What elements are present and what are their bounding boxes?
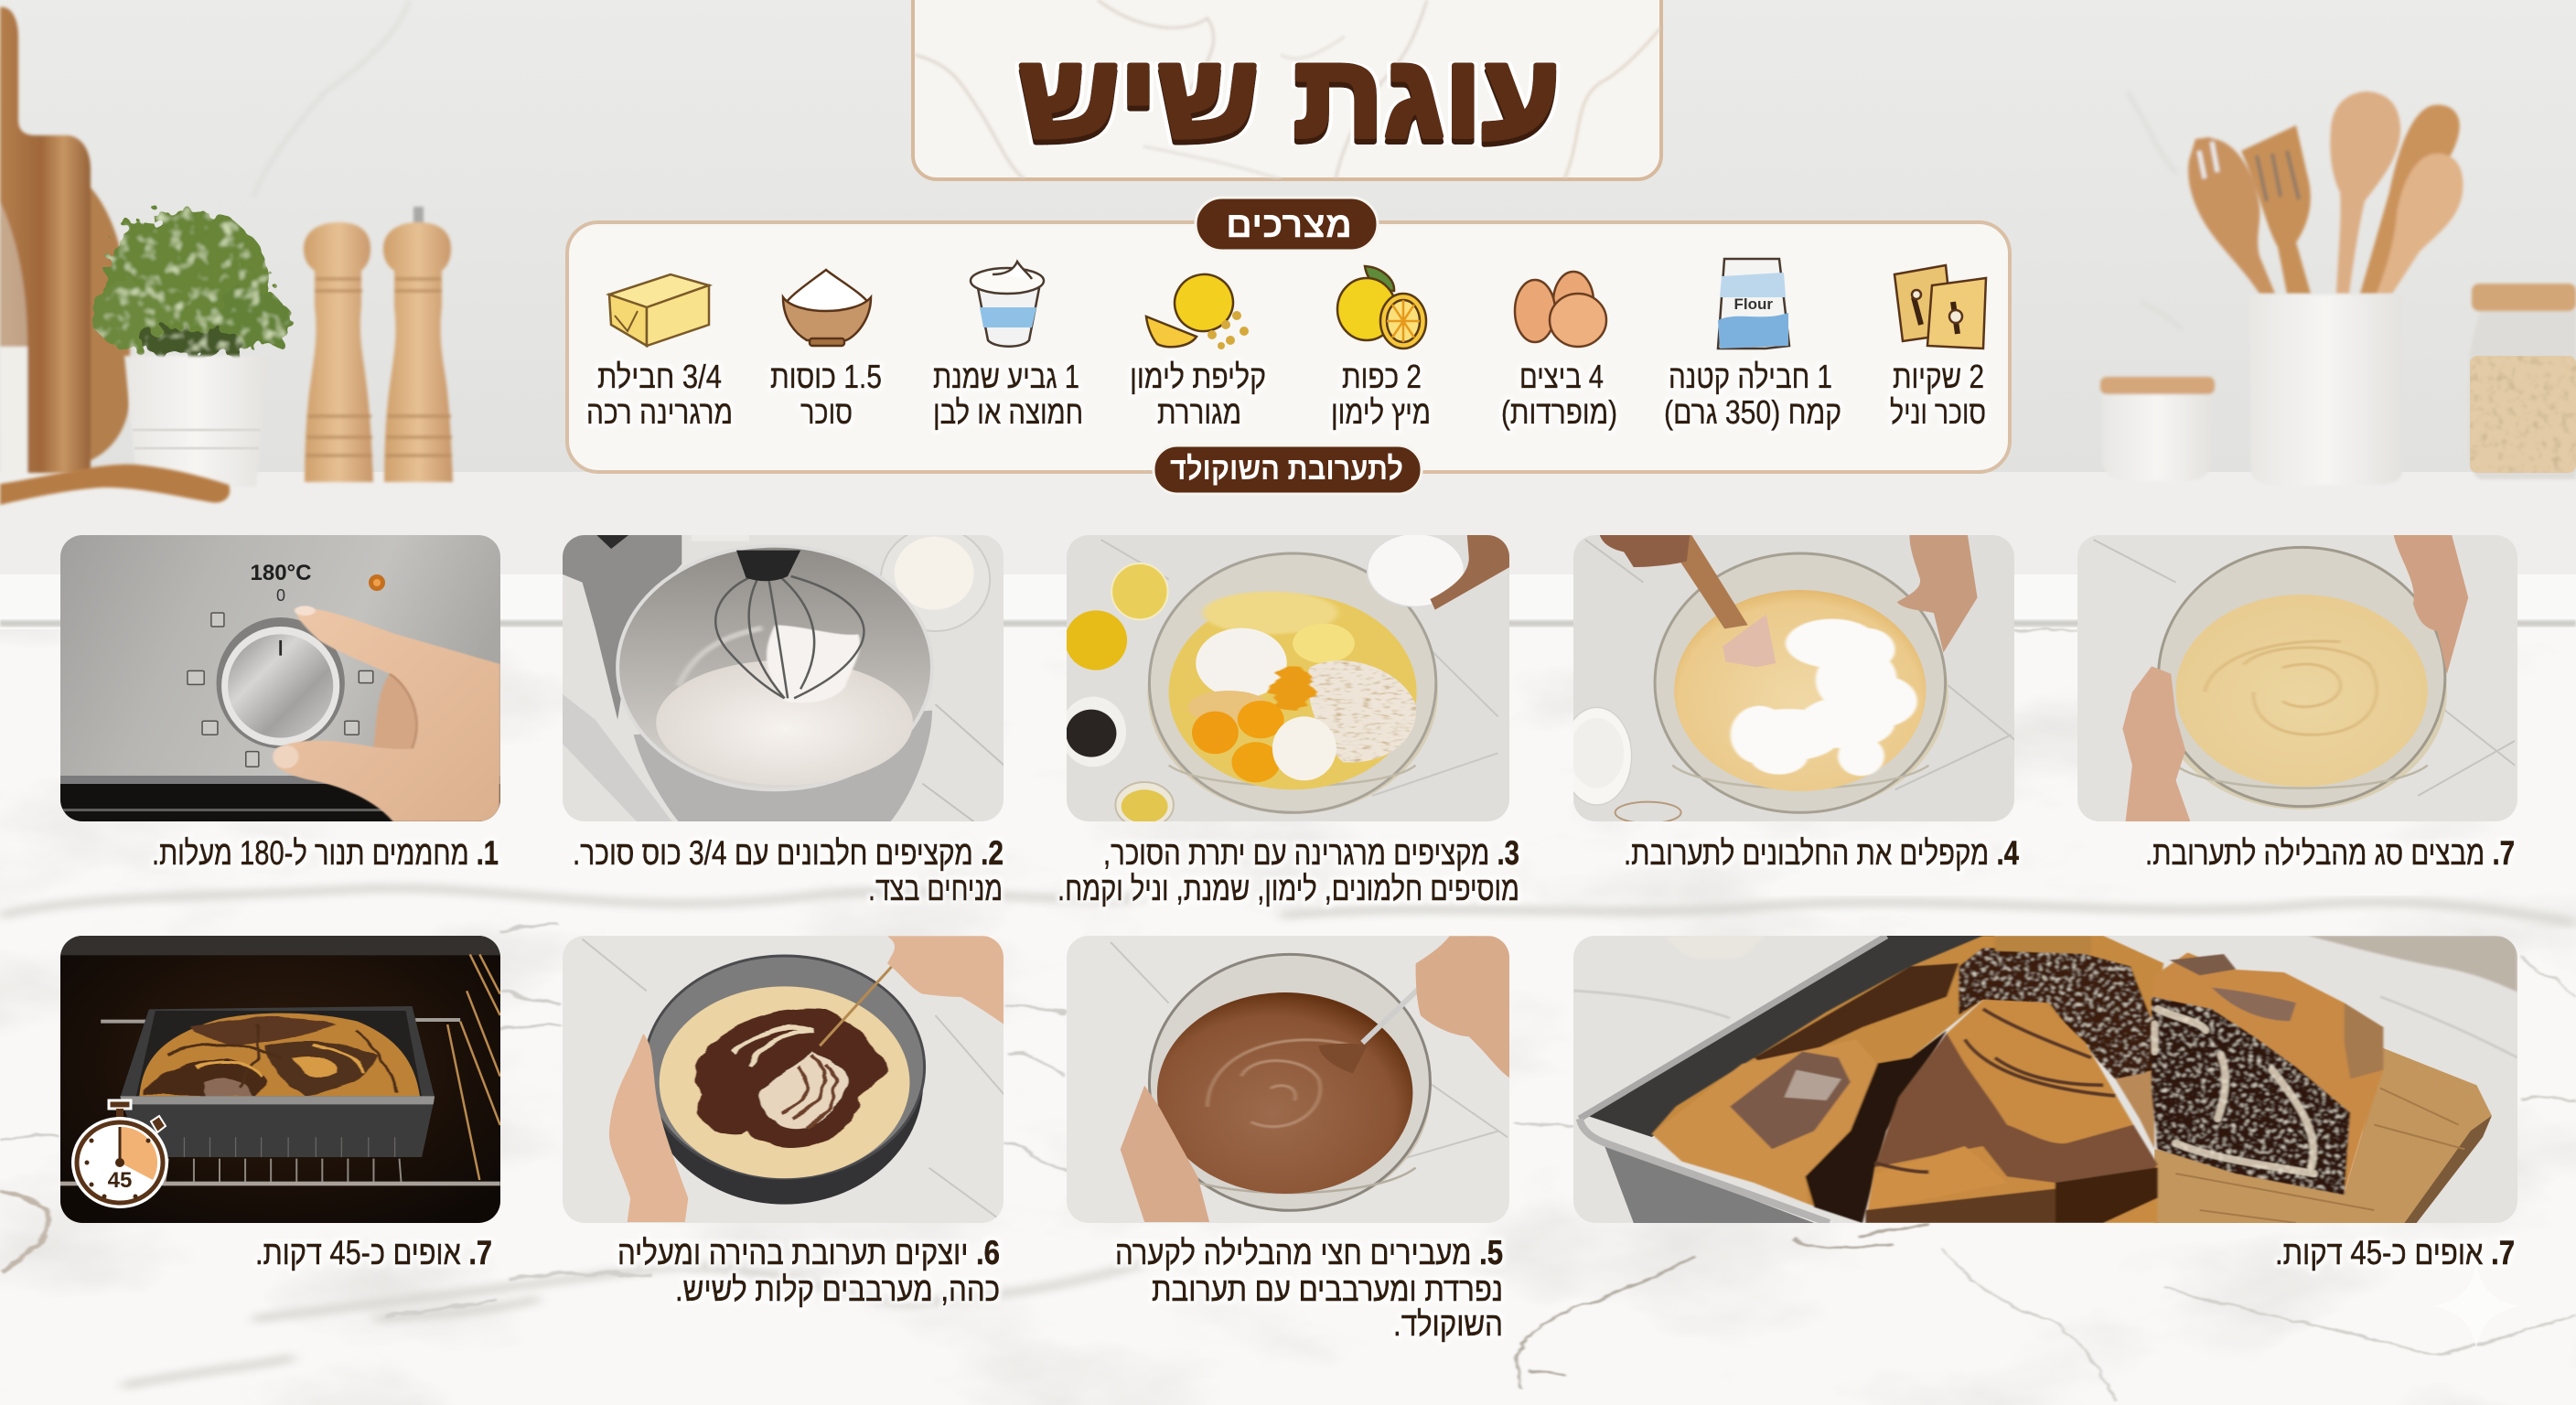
caption: step 7 top: 7. מבצים סג מהבלילה לתערובת. xyxy=(2145,834,2515,872)
icon: flour bag xyxy=(1718,259,1789,349)
ingredient: sugar xyxy=(770,358,882,431)
ingredient: vanilla sugar: 2 שקיות xyxy=(1893,358,1984,395)
ingredient: vanilla sugar xyxy=(1890,358,1986,431)
ingredient: eggs: 4 ביצים xyxy=(1519,358,1604,395)
wooden spoon on counter xyxy=(0,465,230,505)
icon: sparkle watermark xyxy=(2432,1262,2520,1350)
caption: step 1: 1. מחממים תנור ל-180 מעלות. xyxy=(152,834,499,872)
caption: bake right: 7. אופים כ-45 דקות. xyxy=(2275,1234,2515,1271)
cake right slice xyxy=(2152,952,2383,1195)
caption: step 3 xyxy=(1057,834,1519,907)
icon: eggs xyxy=(1515,272,1606,347)
step 6: marbling photo xyxy=(560,935,1009,1224)
cake back and left piece xyxy=(1652,936,2163,1223)
plant in white pot xyxy=(94,210,290,487)
heading pill: chocolate mixture xyxy=(1154,445,1422,494)
icon: bowl of sugar xyxy=(783,270,871,346)
heading pill: chocolate mixture: לתערובת השוקולד xyxy=(1170,451,1403,487)
step 7 (left): loaf in oven photo xyxy=(60,936,503,1224)
step 7 (right): finished marble cake photo xyxy=(1573,936,2517,1223)
caption: step 6: 6. יוצקים תערובת בהירה ומעליה xyxy=(617,1234,1000,1271)
small lidded jar xyxy=(2100,377,2215,481)
ingredient: sugar: סוכר xyxy=(800,393,853,431)
step 2: whisking egg whites photo xyxy=(560,528,1009,823)
caption: step 2: מניחים בצד. xyxy=(868,870,1003,907)
step 5: batter in bowl photo xyxy=(2069,533,2525,823)
title panel xyxy=(913,0,1661,179)
ingredient: lemon zest: מגוררת xyxy=(1157,393,1241,431)
pepper mill left xyxy=(304,222,373,482)
icon: lemon with slice xyxy=(1337,266,1426,349)
caption: bake left: 7. אופים כ-45 דקות. xyxy=(255,1234,492,1271)
caption: step 4: 4. מקפלים את החלבונים לתערובת. xyxy=(1624,834,2019,872)
ingredient: sugar: 1.5 כוסות xyxy=(770,358,882,395)
cake pan xyxy=(1580,936,1995,1223)
title text: עוגת שיש xyxy=(1018,31,1560,162)
caption: step 5: 5. מעבירים חצי מהבלילה לקערה xyxy=(1115,1234,1503,1271)
captions xyxy=(152,834,2515,1343)
caption: step 6 xyxy=(617,1234,1000,1308)
glass jar of oats xyxy=(2469,284,2576,479)
cutting boards xyxy=(0,7,130,476)
heading pill: ingredients xyxy=(1196,198,1378,251)
icon: flour bag: Flour xyxy=(1734,295,1773,313)
ingredient: lemon juice: מיץ לימון xyxy=(1331,393,1431,431)
caption: step 3: 3. מקציפים מרגרינה עם יתרת הסוכר, xyxy=(1103,834,1519,872)
cake central wedge xyxy=(1865,1000,2158,1223)
step 5 (lower): chocolate batter photo xyxy=(1062,935,1518,1224)
ingredient labels xyxy=(586,358,1986,431)
ingredient: flour xyxy=(1664,358,1841,431)
ingredient: lemon juice: 2 כפות xyxy=(1342,358,1422,395)
caption: step 6: כהה, מערבבים קלות לשיש. xyxy=(675,1271,1000,1308)
white crock xyxy=(2249,295,2402,485)
ingredient: vanilla sugar: סוכר וניל xyxy=(1890,393,1986,431)
caption: step 2: 2. מקציפים חלבונים עם 3/4 כוס סוכר. xyxy=(573,834,1004,872)
panel: ingredients xyxy=(567,198,2010,494)
ingredient: lemon juice xyxy=(1331,358,1431,431)
wooden utensils in white crock xyxy=(2188,91,2463,294)
step 1: oven dial photo: 180°C xyxy=(251,561,311,585)
ingredient: flour: 1 חבילה קטנה xyxy=(1669,358,1832,395)
step 1: oven dial photo: 0 xyxy=(276,586,285,605)
ingredient: sour cream: 1 גביע שמנת xyxy=(933,358,1079,395)
ingredient: margarine xyxy=(586,358,733,431)
ingredient: eggs: (מופרדות) xyxy=(1501,393,1617,431)
caption: step 3: מוסיפים חלמונים, לימון, שמנת, וניל וקמח. xyxy=(1057,870,1519,907)
ingredient: lemon zest: קליפת לימון xyxy=(1130,358,1266,395)
icon: lemon zest xyxy=(1146,268,1249,349)
heading pill: ingredients: מצרכים xyxy=(1226,205,1352,245)
step 4: folding whites photo xyxy=(1562,533,2021,823)
icon: butter block xyxy=(609,274,709,346)
caption: step 5: השוקולד. xyxy=(1393,1305,1503,1343)
caption: step 2 xyxy=(573,834,1004,907)
pepper mill right xyxy=(383,207,453,482)
icon: sour cream cup xyxy=(971,262,1044,347)
step 3: mixing ingredients photo xyxy=(1060,533,1518,828)
icon: stopwatch 45 minutes xyxy=(71,1100,168,1208)
ingredient: eggs xyxy=(1501,358,1617,431)
ingredient: sour cream xyxy=(933,358,1083,431)
icon: vanilla sugar sachets xyxy=(1894,265,1986,349)
icon: stopwatch 45 minutes: 45 xyxy=(108,1168,132,1193)
caption: step 5: נפרדת ומערבבים עם תערובת xyxy=(1152,1271,1503,1308)
ingredient: margarine: מרגרינה רכה xyxy=(586,393,733,431)
caption: step 5 xyxy=(1115,1234,1503,1343)
wooden board xyxy=(2154,1047,2492,1223)
ingredient: lemon zest xyxy=(1130,358,1266,431)
ingredient: margarine: 3/4 חבילת xyxy=(597,358,722,395)
step 1: oven dial photo xyxy=(60,535,500,821)
ingredient: sour cream: חמוצה או לבן xyxy=(933,393,1083,431)
ingredient: flour: קמח (350 גרם) xyxy=(1664,393,1841,431)
